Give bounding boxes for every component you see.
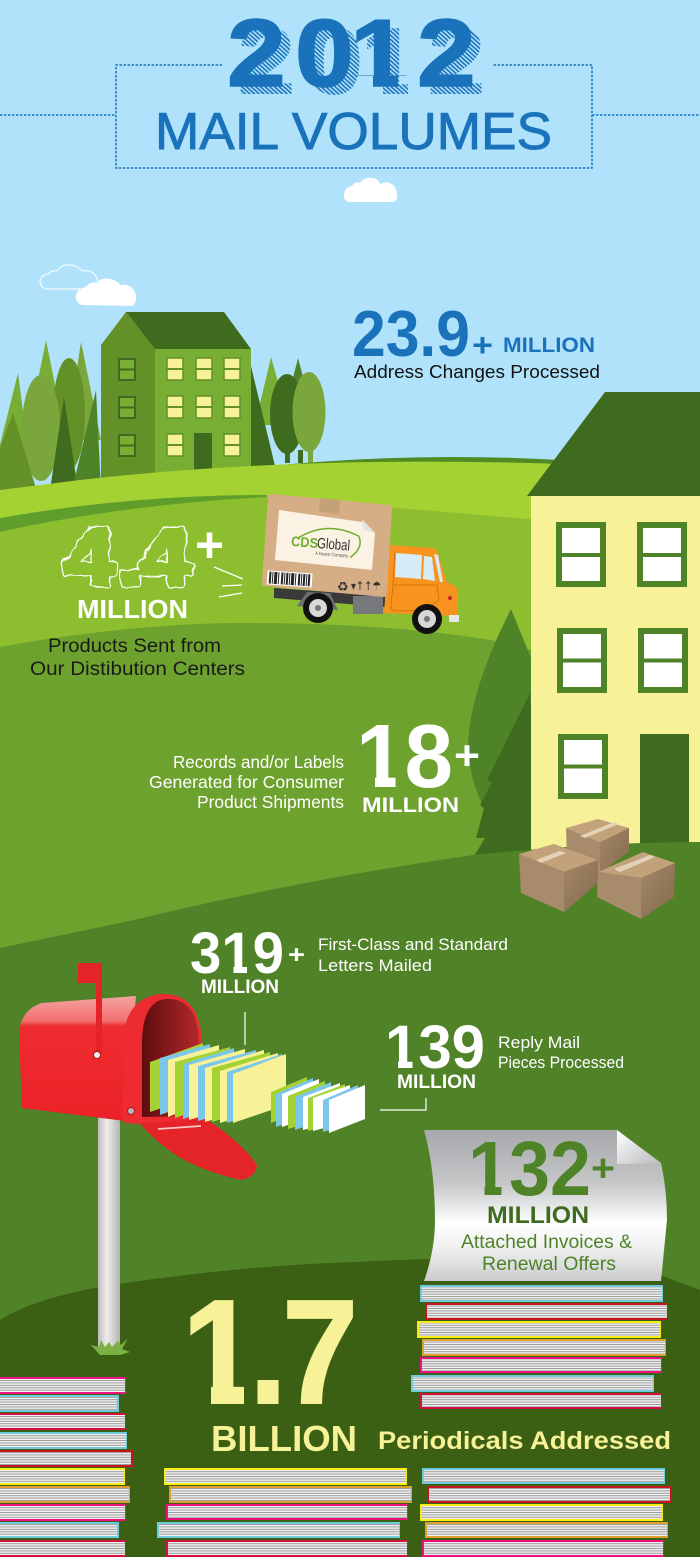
stat: 139 million: [380, 1025, 623, 1111]
lower hill: [0, 842, 700, 1557]
cargo box: [262, 494, 392, 597]
stat: 18 million: Generated for Consumer: [149, 772, 344, 792]
paper sheet: 132 million: Attached Invoices &: [461, 1232, 632, 1253]
number 139: 139: [385, 1013, 485, 1081]
delivery truck: [262, 494, 459, 634]
stat: 319 million: Letters Mailed: [318, 956, 432, 975]
book stack: bottom middle: [157, 1468, 412, 1557]
stat: 18 million: MILLION: [362, 794, 459, 817]
mailbox rim: [123, 994, 202, 1124]
outlined number: 4.4: [64, 513, 191, 602]
stat: 319 million: MILLION: [201, 977, 279, 998]
box left: [519, 844, 598, 912]
mailbox: [19, 963, 257, 1180]
back hill mid green: [0, 497, 540, 680]
logo: CDS: [291, 533, 319, 551]
stat: 1.7 billion periodicals: Periodicals Addressed: [378, 1427, 671, 1455]
heading: mail volumes: MAIL VOLUMES: [155, 103, 552, 161]
clouds: over small house: [40, 265, 136, 306]
flag: [78, 963, 102, 1055]
number 132: 132: [468, 1126, 591, 1212]
back hill stripe: [0, 495, 267, 532]
stat: 4.4 million: Products Sent from: [48, 636, 221, 657]
stat: 1.7 billion periodicals: [190, 1300, 670, 1452]
paper sheet: 132 million: +: [591, 1148, 615, 1190]
number 1.7: 1.7: [182, 1270, 358, 1435]
stat: 139 million: MILLION: [397, 1072, 476, 1093]
paper sheet: 132 million: Renewal Offers: [482, 1254, 616, 1275]
cab: [384, 545, 458, 616]
stat: 4.4 million: Our Distibution Centers: [30, 659, 245, 680]
stat: 18 million: Records and/or Labels: [173, 752, 344, 772]
stat: 1.7 billion periodicals: BILLION: [211, 1418, 357, 1459]
letters: small group: [271, 1077, 365, 1133]
logo: [290, 525, 361, 560]
hills: [0, 457, 560, 960]
stat: 4.4 million: +: [195, 517, 224, 573]
stat: 4.4 million: [30, 513, 245, 680]
trees behind small house: [0, 340, 326, 495]
stat: 23.9 million: Address Changes Processed: [354, 361, 600, 382]
logo: Global: [316, 535, 351, 555]
stat: 319 million: +: [288, 941, 305, 969]
stat: 4.4 million: MILLION: [77, 596, 188, 624]
stat: 18 million: [150, 724, 478, 812]
cardboard boxes: [519, 819, 675, 919]
number 319: 319: [190, 921, 284, 986]
heading: 2012 shadow: 2012: [237, 8, 486, 115]
stat: 319 million: First-Class and Standard: [318, 935, 508, 954]
stat: 23.9 million: +: [472, 327, 493, 363]
back hill lime: [0, 462, 560, 660]
box right: [597, 852, 675, 919]
title block: [0, 18, 698, 169]
stat: 18 million: Product Shipments: [197, 792, 344, 812]
darkest foreground hill: [0, 1259, 700, 1557]
stat: 139 million: Pieces Processed: [498, 1053, 624, 1072]
box label: [275, 510, 375, 570]
box back: [566, 819, 629, 873]
stat: 319 million: [190, 921, 508, 1045]
back hill rim: [280, 457, 560, 560]
front hill: [0, 623, 540, 960]
wheels: [303, 593, 333, 623]
book stack: top right: [411, 1285, 668, 1409]
mailbox post: [98, 1110, 120, 1350]
windows: [559, 525, 685, 796]
chassis: [274, 588, 385, 607]
stat: 23.9 million: MILLION: [503, 334, 595, 357]
stat: 23.9 million: [352, 297, 600, 382]
paper sheet: 132 million: [424, 1126, 667, 1281]
number 18: 18: [356, 707, 453, 807]
handling icons: ♻: [337, 580, 349, 595]
cloud solid: [76, 278, 136, 306]
small green house: [101, 312, 251, 480]
mailbox door: [136, 1116, 257, 1180]
big yellow house: [527, 392, 700, 852]
big house tree: [468, 609, 540, 858]
book stack: left: [0, 1377, 133, 1557]
logo: A Hearst Company: [315, 551, 349, 559]
motion lines: [214, 567, 243, 597]
letters: large group: [150, 1043, 286, 1123]
mailbox inside: [142, 999, 199, 1117]
barcode: [267, 570, 313, 588]
stat: 23.9 million: 23.9: [352, 297, 470, 370]
delivery truck: ▾↑↑☂: [351, 579, 381, 593]
dashed title frame: [0, 65, 700, 168]
stat: 139 million: Reply Mail: [498, 1033, 580, 1052]
cloud: under title: [344, 178, 397, 202]
mailbox body: [19, 996, 136, 1121]
paper sheet: 132 million: MILLION: [487, 1202, 589, 1229]
heading: 2012: 2012: [227, 0, 476, 107]
cloud outline: [40, 265, 98, 289]
book stack: bottom right: [420, 1468, 671, 1557]
stat: 18 million: +: [454, 732, 480, 778]
post lower part and grass: [91, 1260, 130, 1355]
outlined number: 4.4: [64, 513, 191, 602]
